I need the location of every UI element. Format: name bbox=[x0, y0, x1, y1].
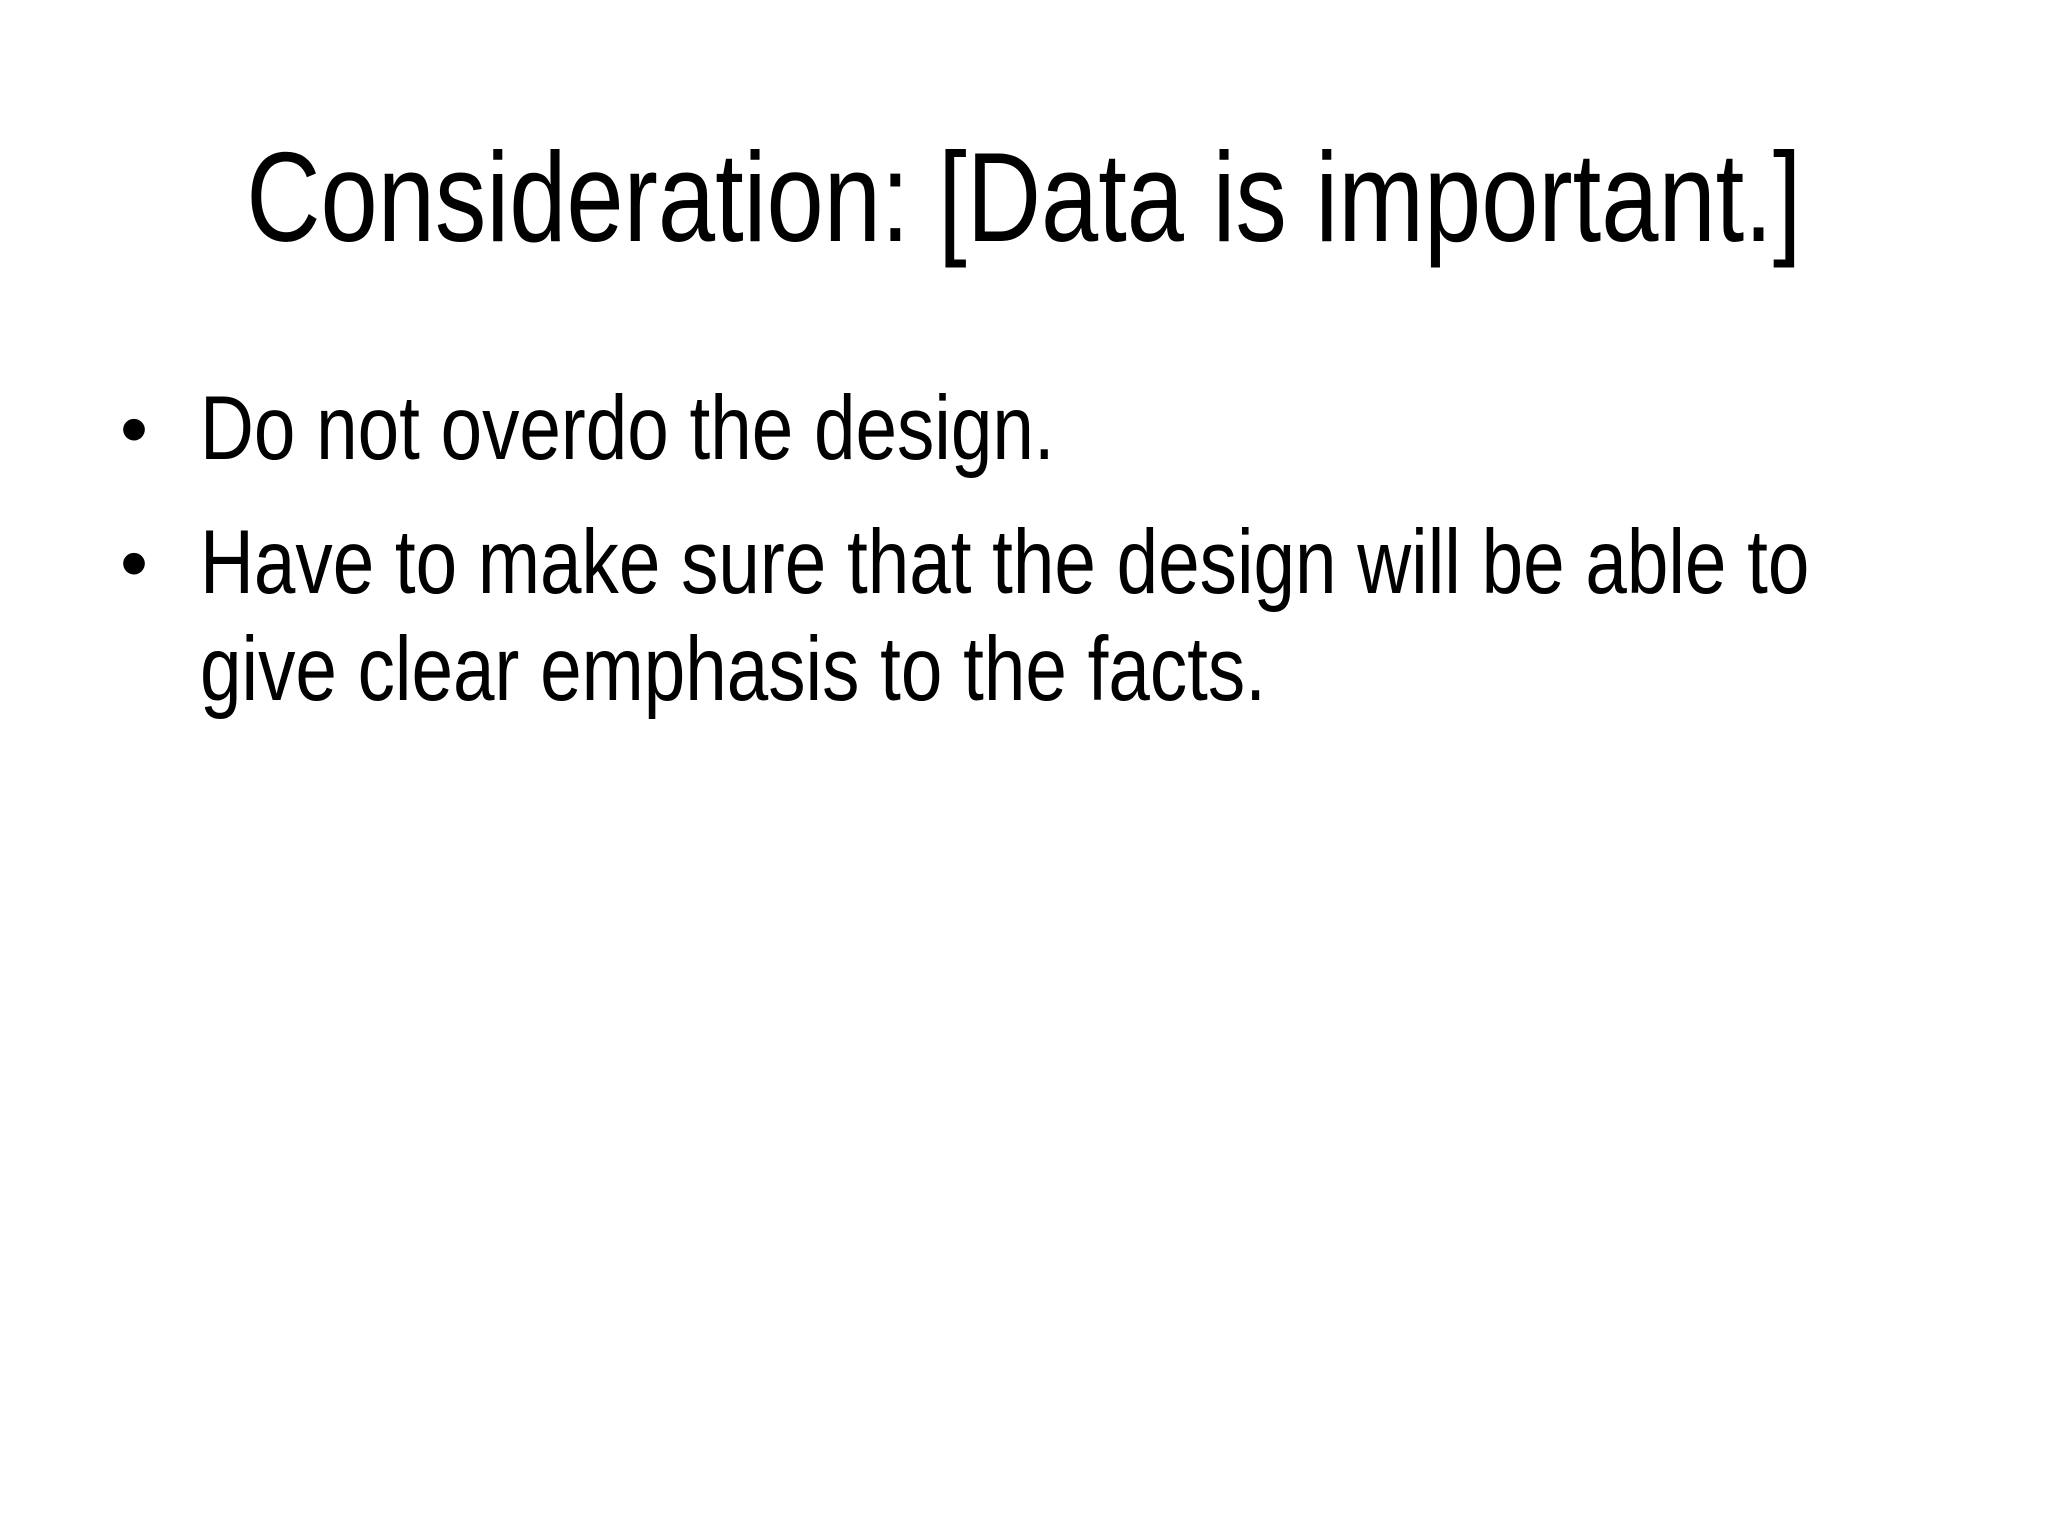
bullet: clear emphasis: • bbox=[120, 518, 148, 607]
bullet list bbox=[120, 378, 1809, 720]
bullet: do not overdo: Do not overdo the design. bbox=[200, 378, 1055, 479]
bullet: do not overdo: • bbox=[120, 384, 148, 473]
title: Consideration: [Data is important.] bbox=[246, 126, 1801, 268]
bullet: clear emphasis bbox=[120, 512, 1809, 720]
bullet: clear emphasis: Have to make sure that the design will be able to bbox=[200, 512, 1809, 613]
bullet: clear emphasis: give clear emphasis to the facts. bbox=[200, 619, 1266, 720]
